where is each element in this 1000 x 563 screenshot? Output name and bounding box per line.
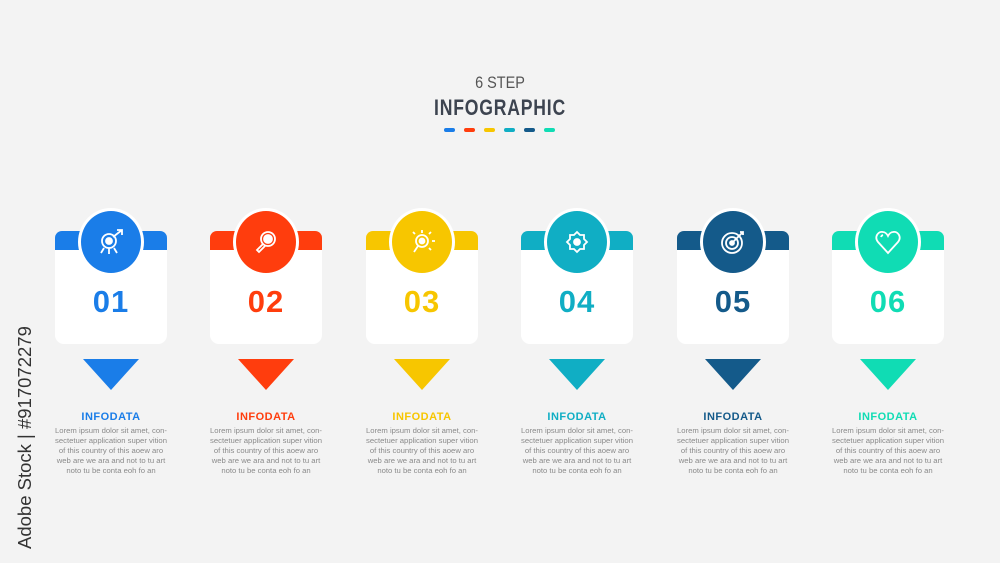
color dots bbox=[444, 128, 555, 132]
arrow bbox=[705, 359, 761, 390]
arrow bbox=[394, 359, 450, 390]
title: INFOGRAPHIC bbox=[434, 95, 566, 120]
title bbox=[434, 73, 566, 120]
icon: magnifier bbox=[233, 208, 299, 276]
text: web are we ara and not to tu art bbox=[834, 456, 942, 465]
step 2 bbox=[210, 208, 322, 475]
heading: INFODATA bbox=[703, 411, 763, 423]
number: 06 bbox=[870, 284, 906, 319]
step 6 bbox=[832, 208, 944, 475]
heading: INFODATA bbox=[81, 411, 141, 423]
text: sectetuer application super vition bbox=[366, 436, 478, 445]
heading: INFODATA bbox=[392, 411, 452, 423]
arrow bbox=[83, 359, 139, 390]
text: web are we ara and not to tu art bbox=[57, 456, 165, 465]
text bbox=[210, 426, 322, 475]
text: web are we ara and not to tu art bbox=[368, 456, 476, 465]
text: sectetuer application super vition bbox=[521, 436, 633, 445]
text: web are we ara and not to tu art bbox=[212, 456, 320, 465]
arrow bbox=[860, 359, 916, 390]
arrow bbox=[549, 359, 605, 390]
arrow bbox=[238, 359, 294, 390]
step 5 bbox=[677, 208, 789, 475]
heading: INFODATA bbox=[236, 411, 296, 423]
watermark side text: Adobe Stock | #917072279 bbox=[14, 326, 35, 549]
text: sectetuer application super vition bbox=[832, 436, 944, 445]
text: noto tu be conta eoh fo an bbox=[66, 466, 156, 475]
number: 02 bbox=[248, 284, 284, 319]
text bbox=[677, 426, 789, 475]
text: noto tu be conta eoh fo an bbox=[532, 466, 622, 475]
text: Lorem ipsum dolor sit amet, con- bbox=[832, 426, 944, 435]
icon: heart bbox=[855, 208, 921, 276]
text: Lorem ipsum dolor sit amet, con- bbox=[521, 426, 633, 435]
icon: gear badge bbox=[544, 208, 610, 276]
number: 03 bbox=[404, 284, 440, 319]
text bbox=[521, 426, 633, 475]
text: web are we ara and not to tu art bbox=[523, 456, 631, 465]
text: sectetuer application super vition bbox=[677, 436, 789, 445]
text: of this country of this aoew aro bbox=[836, 446, 940, 455]
text: of this country of this aoew aro bbox=[214, 446, 318, 455]
text: Lorem ipsum dolor sit amet, con- bbox=[55, 426, 167, 435]
text: noto tu be conta eoh fo an bbox=[688, 466, 778, 475]
text bbox=[832, 426, 944, 475]
text: web are we ara and not to tu art bbox=[679, 456, 787, 465]
text: Lorem ipsum dolor sit amet, con- bbox=[677, 426, 789, 435]
text bbox=[55, 426, 167, 475]
text bbox=[366, 426, 478, 475]
step 3 bbox=[366, 208, 478, 475]
text: noto tu be conta eoh fo an bbox=[221, 466, 311, 475]
icon: idea bulb bbox=[389, 208, 455, 276]
icon: target with arrow bbox=[78, 208, 144, 276]
text: noto tu be conta eoh fo an bbox=[843, 466, 933, 475]
title: 6 STEP bbox=[475, 73, 525, 92]
text: sectetuer application super vition bbox=[55, 436, 167, 445]
heading: INFODATA bbox=[858, 411, 918, 423]
icon: bullseye bbox=[700, 208, 766, 276]
text: noto tu be conta eoh fo an bbox=[377, 466, 467, 475]
number: 05 bbox=[715, 284, 751, 319]
number: 01 bbox=[93, 284, 129, 319]
step 1 bbox=[55, 208, 167, 475]
text: Lorem ipsum dolor sit amet, con- bbox=[366, 426, 478, 435]
text: of this country of this aoew aro bbox=[525, 446, 629, 455]
text: of this country of this aoew aro bbox=[59, 446, 163, 455]
text: of this country of this aoew aro bbox=[370, 446, 474, 455]
heading: INFODATA bbox=[547, 411, 607, 423]
text: of this country of this aoew aro bbox=[681, 446, 785, 455]
step 4 bbox=[521, 208, 633, 475]
number: 04 bbox=[559, 284, 595, 319]
text: Lorem ipsum dolor sit amet, con- bbox=[210, 426, 322, 435]
text: sectetuer application super vition bbox=[210, 436, 322, 445]
